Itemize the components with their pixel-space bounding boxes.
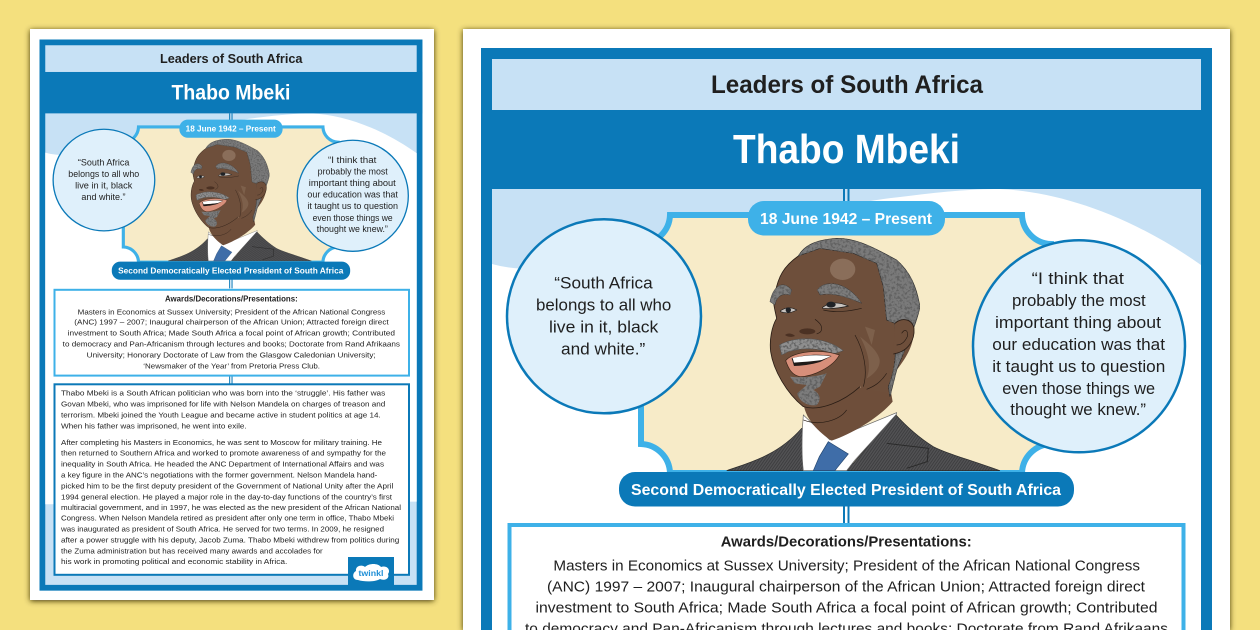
panel: main poster <box>463 29 1230 630</box>
quote left: and white.” <box>561 340 646 359</box>
portrait <box>727 238 1000 471</box>
biography box left: then returned to Southern Africa and worked to promote awareness of and sympathy for the <box>61 449 386 458</box>
frame <box>39 39 422 591</box>
quote right: it taught us to question <box>992 357 1165 376</box>
biography box left: When his father was imprisoned, he went into exile. <box>61 421 247 430</box>
icon: twinkl logo: twinkl <box>358 568 384 578</box>
name band <box>481 110 1212 189</box>
quote left <box>507 219 701 413</box>
series heading: Leaders of South Africa <box>160 51 303 66</box>
portrait frame <box>641 215 1051 473</box>
biography box left: multiracial government, and in 1997, he was elected as the new president of the African National <box>61 503 401 512</box>
biography box left: terrorism. Mbeki joined the Youth League and became active in student politics at age 14. <box>61 411 381 420</box>
awards box <box>510 525 1184 630</box>
quote right: “I think that <box>1032 269 1124 288</box>
biography box left: was inaugurated as president of South Africa. He served for two terms. In 2009, he resigned <box>60 525 384 534</box>
awards box: investment to South Africa; Made South Africa a focal point of African growth; Contributed <box>536 600 1158 617</box>
date pill: 18 June 1942 – Present <box>186 124 276 134</box>
quote right: our education was that <box>307 190 398 200</box>
awards box left: investment to South Africa; Made South Africa a focal point of African growth; Contributed <box>68 329 395 338</box>
portrait frame <box>123 127 338 262</box>
biography box left: Govan Mbeki, who was imprisoned for life with Nelson Mandela on charges of treason and <box>61 400 385 409</box>
white wave <box>492 189 1201 630</box>
biography box left: Congress. When Nelson Mandela retired as president after only one term in office, Thabo Mbeki <box>61 514 394 523</box>
icon: twinkl logo <box>348 557 394 590</box>
panel: left poster thumbnail <box>30 29 434 600</box>
portrait <box>168 139 311 261</box>
quote right: it taught us to question <box>307 201 398 211</box>
quote right: thought we knew.” <box>317 224 388 234</box>
quote left: live in it, black <box>549 318 659 337</box>
quote right: “I think that <box>328 155 377 165</box>
quote right: our education was that <box>992 335 1165 354</box>
quote left: live in it, black <box>75 181 133 191</box>
left poster upper artwork and text <box>39 39 422 591</box>
awards box left: (ANC) 1997 – 2007; Inaugural chairperson of the African Union; Attracted foreign direct <box>74 318 390 327</box>
quote right <box>297 140 408 251</box>
quote left: belongs to all who <box>68 169 139 179</box>
header band <box>39 72 422 113</box>
awards box left: ‘Newsmaker of the Year’ from Pretoria Press Club. <box>143 362 320 371</box>
awards box left: Awards/Decorations/Presentations: <box>165 295 298 304</box>
biography box left: 1994 general election. He played a major role in the day-to-day functions of the country’s first <box>61 492 393 501</box>
biography box left: the Zuma administration but has received many awards and accolades for <box>61 546 323 555</box>
quote right: important thing about <box>995 313 1161 332</box>
date pill: 18 June 1942 – Present <box>760 211 933 228</box>
biography box left: his work in promoting political and economic stability in Africa. <box>61 557 287 566</box>
quote left <box>53 129 155 231</box>
biography box left: a key figure in the ANC’s negotiations with the former government. Nelson Mandela hand- <box>61 471 378 480</box>
quote right: even those things we <box>1002 379 1155 398</box>
quote left: belongs to all who <box>536 296 671 315</box>
main poster sheet <box>463 29 1230 630</box>
quote left: and white.” <box>81 192 126 202</box>
awards box left: to democracy and Pan-Africanism through lectures and books; Doctorate from Rand Afrikaans <box>63 340 400 349</box>
quote left: “South Africa <box>554 274 653 293</box>
quote right: thought we knew.” <box>1010 400 1146 419</box>
name band: Thabo Mbeki <box>733 126 960 172</box>
quote right: important thing about <box>309 178 396 188</box>
awards box: (ANC) 1997 – 2007; Inaugural chairperson of the African Union; Attracted foreign direct <box>547 579 1146 596</box>
light background <box>492 59 1201 630</box>
awards box: Masters in Economics at Sussex University; President of the African National Congress <box>553 558 1140 575</box>
quote left: “South Africa <box>78 158 129 168</box>
role pill <box>619 472 1074 506</box>
name heading: Thabo Mbeki <box>172 81 290 105</box>
biography box left: after a power struggle with his deputy, Jacob Zuma. Thabo Mbeki withdrew from politics during <box>61 536 399 545</box>
series heading band: Leaders of South Africa <box>711 71 984 99</box>
date pill <box>748 201 945 236</box>
awards box left: Masters in Economics at Sussex University; President of the African National Congress <box>78 308 385 317</box>
biography box left: After completing his Masters in Economics, he was sent to Moscow for military training. He <box>61 438 382 447</box>
biography box left: Thabo Mbeki is a South African politician who was born into the ‘struggle’. His father was <box>61 389 385 398</box>
quote right: probably the most <box>318 167 388 177</box>
connector <box>844 189 848 523</box>
biography box left: picked him to be the first deputy president of the Government of National Unity after the April <box>61 481 394 490</box>
light background <box>45 45 417 585</box>
role pill <box>112 262 350 280</box>
left poster sheet <box>30 29 434 600</box>
date pill <box>179 120 283 138</box>
white wave <box>45 113 417 504</box>
awards box: Awards/Decorations/Presentations: <box>721 534 972 551</box>
quote right <box>973 240 1185 452</box>
role pill: Second Democratically Elected President of South Africa <box>631 482 1061 499</box>
role pill: Second Democratically Elected President of South Africa <box>118 266 344 276</box>
frame <box>481 48 1212 630</box>
quote right: probably the most <box>1012 291 1146 310</box>
quote right: even those things we <box>313 213 393 223</box>
connector <box>230 113 232 384</box>
awards box left: University; Honorary Doctorate of Law from the Glasgow Caledonian University; <box>87 351 376 360</box>
biography box left: inequality in South Africa. He headed the ANC Department of International Affairs and was <box>61 460 384 469</box>
awards box left <box>54 290 409 376</box>
biography box left <box>54 384 409 575</box>
